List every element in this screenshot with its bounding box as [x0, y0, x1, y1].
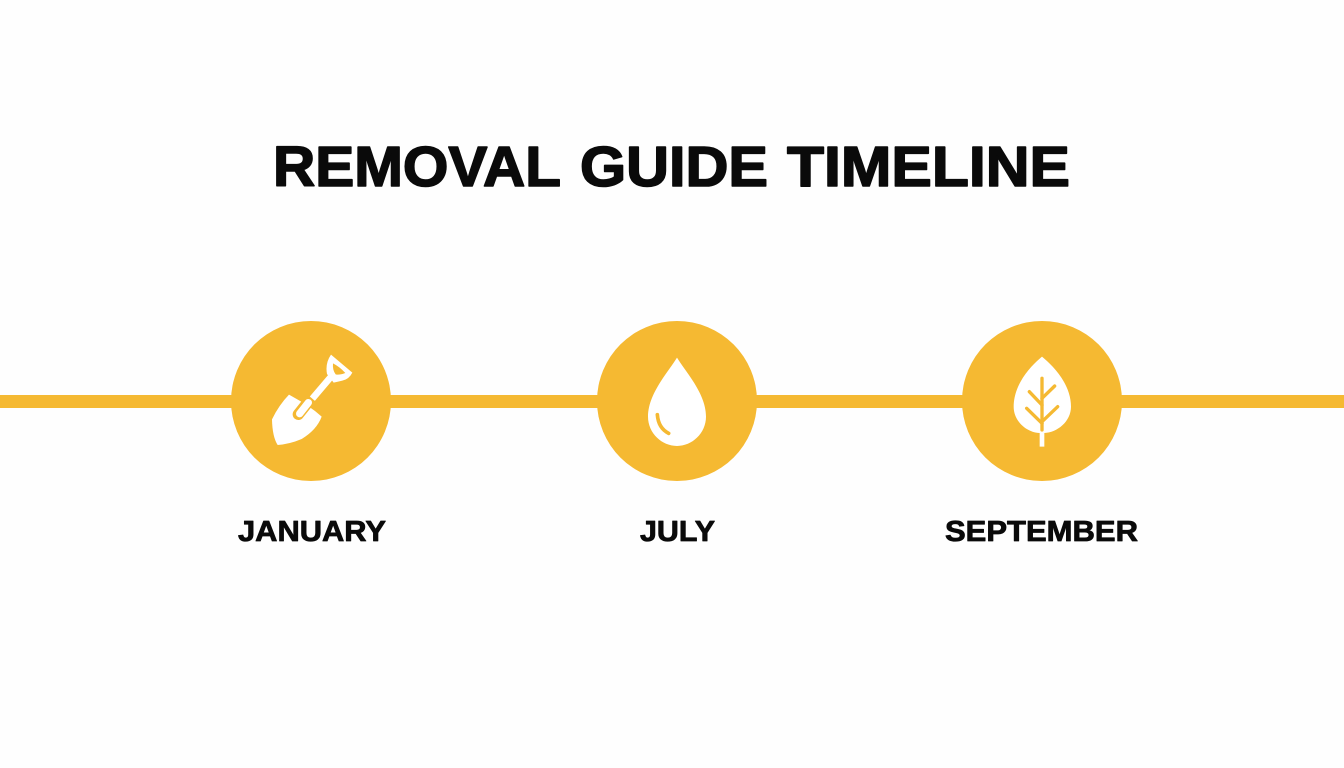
title: TIMELINE — [787, 135, 1070, 199]
milestone: September — [945, 321, 1138, 548]
label: September: SEPTEMBER — [945, 516, 1138, 548]
icon: shovel — [272, 355, 352, 445]
milestone: July — [597, 321, 757, 548]
timeline line — [0, 395, 1344, 408]
circle: September — [962, 321, 1122, 481]
milestone: January — [231, 321, 391, 548]
label: July: JULY — [640, 516, 715, 548]
title — [273, 135, 1070, 199]
icon: water drop — [648, 358, 706, 446]
icon: leaf — [1014, 357, 1071, 447]
title: GUIDE — [580, 135, 768, 199]
circle: January — [231, 321, 391, 481]
label: January: JANUARY — [238, 516, 386, 548]
title: REMOVAL — [273, 135, 561, 199]
circle: July — [597, 321, 757, 481]
